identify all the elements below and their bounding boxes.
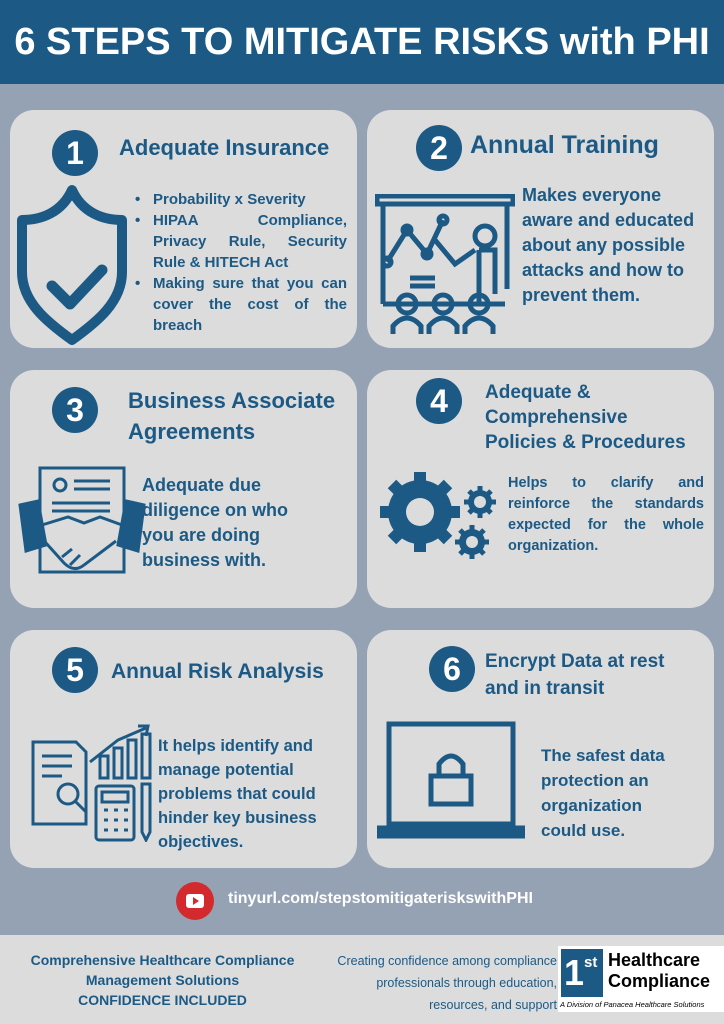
bullet list: •	[135, 212, 140, 229]
panel: 3 business associate agreements	[10, 370, 357, 608]
tagline left: CONFIDENCE INCLUDED	[78, 992, 247, 1008]
number 2: 2	[430, 130, 448, 166]
icon: shield	[17, 185, 127, 346]
footer	[0, 935, 724, 1024]
text 5: It helps identify and manage potential problems that could hinder key business objectives.	[158, 737, 317, 851]
text 3: Adequate due diligence on who you are doing business with.	[142, 475, 288, 570]
panel: 6 encrypt data	[367, 630, 714, 868]
tagline right: Creating confidence among compliance professionals through education, resources, and support	[337, 954, 557, 1012]
number 1: 1	[66, 135, 84, 171]
bullet list: •	[135, 275, 140, 292]
bullet list: Making sure that you can cover the cost of the breach	[153, 275, 347, 334]
number 2	[416, 125, 462, 171]
heading 3	[128, 388, 335, 444]
bullet list: HIPAA Compliance, Privacy Rule, Security Rule & HITECH Act	[153, 212, 347, 271]
heading 3: Agreements	[128, 419, 255, 444]
tagline left: Management Solutions	[86, 972, 239, 988]
text 6: The safest data protection an organization could use.	[541, 746, 665, 840]
logo: 1st	[564, 952, 597, 993]
icon: analysis docs	[32, 724, 152, 842]
bullet list: •	[135, 191, 140, 208]
panel: 4 policies & procedures	[367, 370, 714, 608]
number 6	[429, 646, 475, 692]
icon: laptop lock	[377, 722, 525, 838]
link with youtube icon	[176, 882, 533, 920]
url text: tinyurl.com/stepstomitigateriskswithPHI	[228, 890, 533, 907]
title: 6 STEPS TO MITIGATE RISKS with PHI	[14, 21, 710, 63]
number 3	[52, 387, 98, 433]
number 1	[52, 130, 98, 176]
heading 5: Annual Risk Analysis	[111, 660, 324, 683]
heading 6	[485, 651, 665, 699]
logo: Healthcare	[608, 950, 700, 970]
heading 1: Adequate Insurance	[119, 135, 329, 160]
bullet list	[135, 191, 347, 334]
number 4: 4	[430, 383, 448, 419]
icon: handshake contract	[18, 466, 146, 574]
number 5: 5	[66, 652, 84, 688]
number 4	[416, 378, 462, 424]
logo	[558, 946, 724, 1012]
heading 4: Comprehensive	[485, 407, 628, 428]
number 5	[52, 647, 98, 693]
icon: youtube	[176, 882, 214, 920]
title	[0, 0, 724, 84]
logo: Compliance	[608, 971, 710, 991]
heading 3: Business Associate	[128, 388, 335, 413]
text 4: Helps to clarify and reinforce the standards expected for the whole organization.	[508, 475, 704, 554]
heading 2: Annual Training	[470, 131, 659, 159]
bullet list: Probability x Severity	[153, 191, 306, 208]
logo: A Division of Panacea Healthcare Solutions	[560, 1000, 704, 1009]
heading 4: Policies & Procedures	[485, 432, 686, 453]
number 3: 3	[66, 392, 84, 428]
text 2: Makes everyone aware and educated about any possible attacks and how to prevent them.	[522, 185, 694, 305]
tagline left	[31, 952, 294, 1008]
number 6: 6	[443, 651, 461, 687]
icon: gears	[380, 472, 496, 559]
icon: presentation	[375, 194, 515, 334]
heading 6: Encrypt Data at rest	[485, 651, 665, 672]
panel: 5 annual risk analysis	[10, 630, 357, 868]
heading 4	[485, 382, 686, 453]
heading 4: Adequate &	[485, 382, 591, 403]
panel: 2 annual training	[367, 110, 714, 348]
panel: 1 adequate insurance	[10, 110, 357, 348]
tagline left: Comprehensive Healthcare Compliance	[31, 952, 294, 968]
heading 6: and in transit	[485, 678, 604, 699]
